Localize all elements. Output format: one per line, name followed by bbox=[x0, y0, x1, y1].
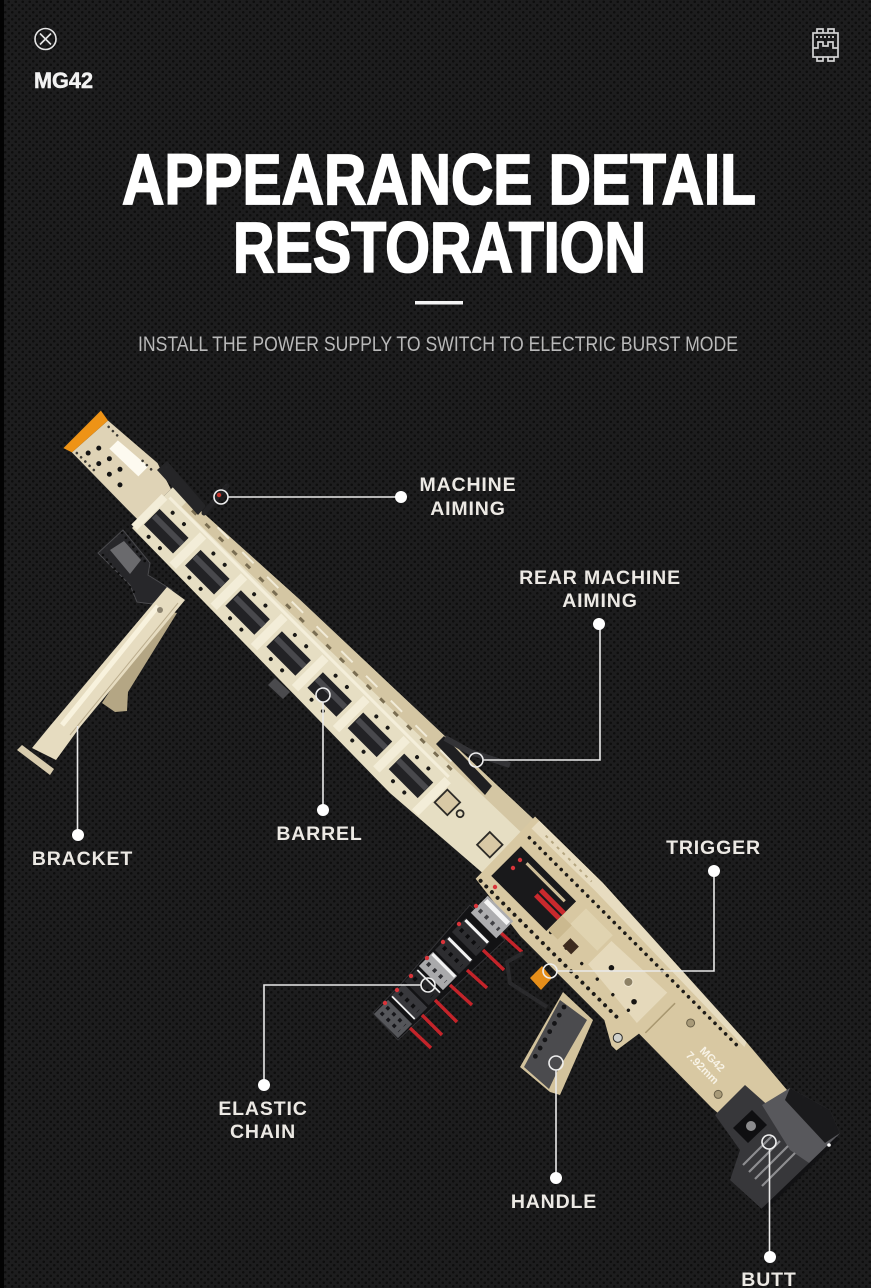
barrel windows bbox=[144, 509, 433, 798]
plain section details bbox=[435, 790, 503, 858]
icon: crossed circle bbox=[35, 28, 56, 50]
icon: building block bbox=[813, 29, 838, 61]
rifle body bbox=[39, 396, 805, 1162]
butt bbox=[715, 1085, 840, 1210]
callout: handle bbox=[511, 1056, 597, 1213]
window highlights bbox=[154, 516, 427, 789]
muzzle cap bbox=[63, 411, 109, 457]
callout: bracket: BRACKET bbox=[32, 848, 133, 870]
window cross bars bbox=[129, 494, 451, 816]
title bbox=[122, 141, 756, 288]
barrel lug bbox=[268, 678, 290, 699]
callout: machine aiming: AIMING bbox=[430, 498, 506, 520]
callout: butt bbox=[741, 1135, 797, 1288]
callout: elastic chain bbox=[218, 978, 435, 1143]
subtitle: INSTALL THE POWER SUPPLY TO SWITCH TO ELECTRIC BURST MODE bbox=[138, 333, 738, 356]
belt backing bbox=[373, 905, 505, 1040]
callout: trigger: TRIGGER bbox=[666, 837, 761, 859]
foot bbox=[17, 745, 54, 775]
callout: handle: HANDLE bbox=[511, 1191, 597, 1213]
gun belt bbox=[373, 858, 522, 1048]
callout: trigger bbox=[543, 837, 761, 978]
callout: machine aiming: MACHINE bbox=[420, 474, 516, 496]
callout: machine aiming bbox=[214, 474, 516, 520]
model name: MG42 bbox=[34, 68, 93, 93]
rear receiver bbox=[459, 816, 805, 1162]
bracket bbox=[17, 530, 185, 775]
title: RESTORATION bbox=[233, 209, 646, 288]
trigger guard bbox=[507, 953, 552, 1007]
rear sight bbox=[436, 736, 510, 795]
handle bbox=[520, 992, 593, 1095]
bullets bbox=[410, 932, 522, 1048]
callout: barrel bbox=[276, 688, 363, 845]
title: APPEARANCE DETAIL bbox=[122, 141, 756, 220]
barrel jacket bbox=[128, 473, 535, 879]
stock lettering bbox=[683, 1040, 730, 1087]
stock lettering: MG42 bbox=[697, 1045, 727, 1075]
front sight bbox=[157, 461, 227, 515]
callout: rear machine aiming: REAR MACHINE bbox=[519, 567, 681, 589]
divider bbox=[415, 301, 463, 304]
stock lettering: 7.92mm bbox=[683, 1049, 721, 1087]
barrel holes bbox=[149, 513, 439, 803]
callout: rear machine aiming bbox=[469, 567, 681, 767]
red tips bbox=[383, 858, 522, 1005]
callout: elastic chain: ELASTIC bbox=[218, 1098, 308, 1120]
chamber opening bbox=[491, 846, 600, 955]
bracket mount block bbox=[98, 530, 172, 604]
belt links bbox=[374, 896, 513, 1038]
callout: elastic chain: CHAIN bbox=[230, 1121, 296, 1143]
callout: bracket bbox=[32, 726, 133, 870]
callout: rear machine aiming: AIMING bbox=[562, 590, 638, 612]
callout: barrel: BARREL bbox=[276, 823, 363, 845]
rear leg bbox=[102, 610, 177, 712]
muzzle shroud bbox=[71, 415, 177, 521]
main leg bbox=[32, 587, 185, 760]
